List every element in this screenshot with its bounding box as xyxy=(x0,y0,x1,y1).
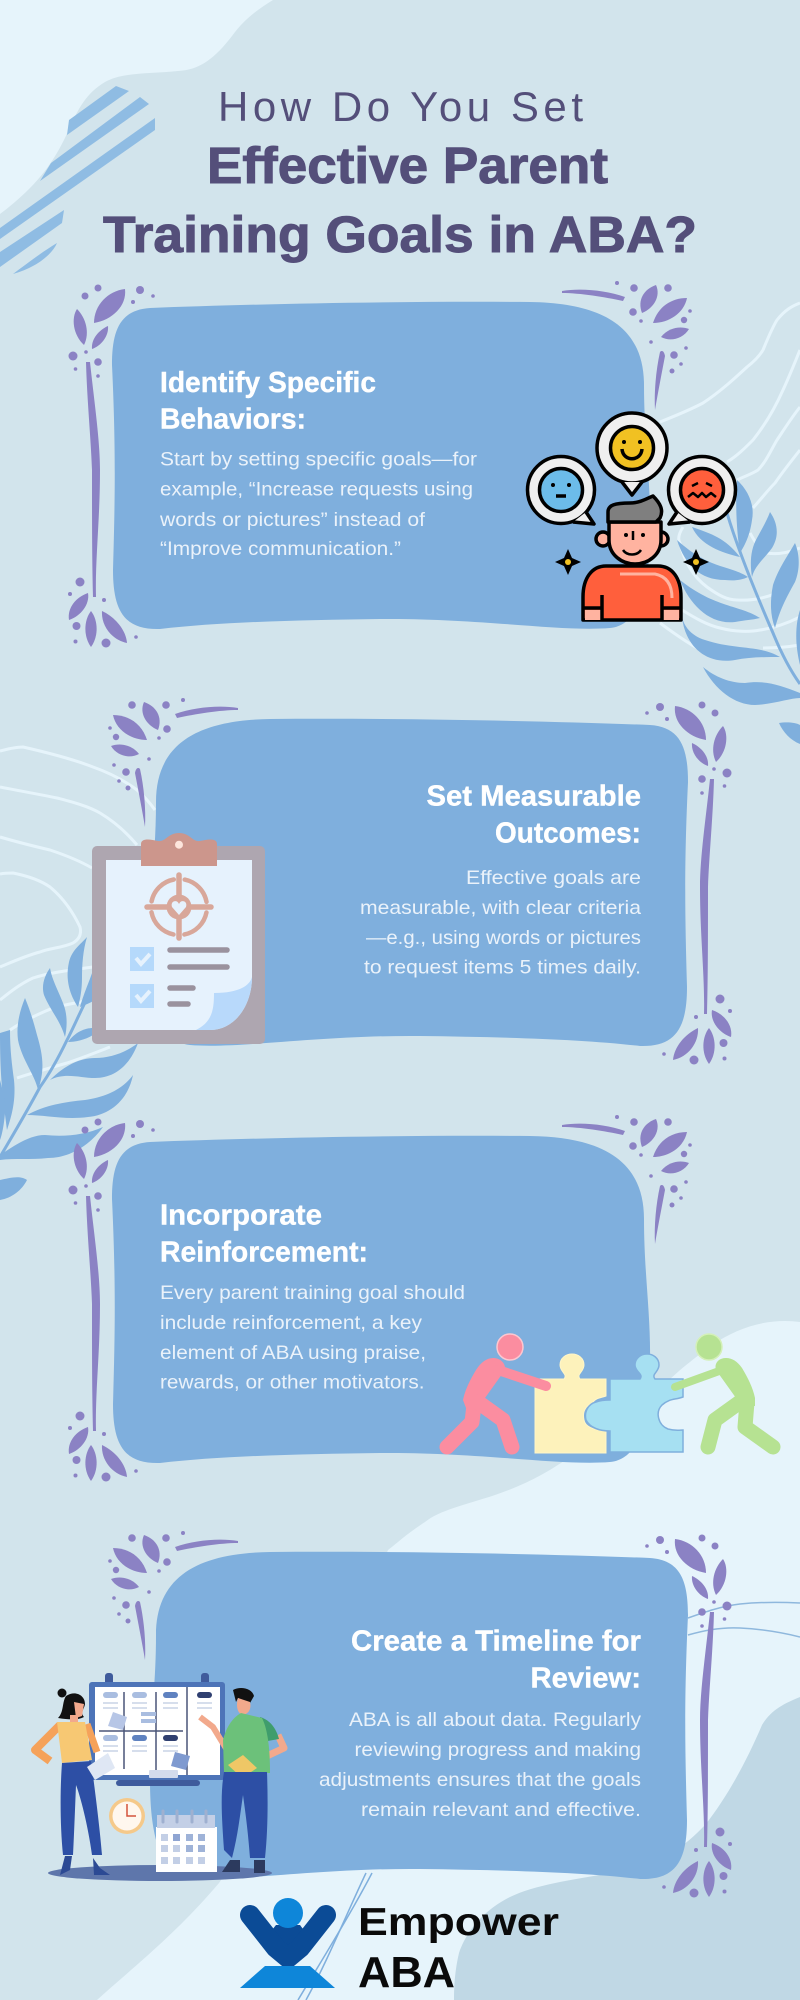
heading: Reinforcement: xyxy=(160,1236,368,1268)
body text: Effective goals are xyxy=(466,867,641,889)
body text: —e.g., using words or pictures xyxy=(366,927,641,949)
body text: adjustments ensures that the goals xyxy=(319,1769,641,1791)
icon: upset bubble xyxy=(668,456,736,524)
diagonal stripes top-left xyxy=(0,86,155,274)
lower light blob xyxy=(97,1321,800,2000)
thin blue lines bottom xyxy=(298,1873,372,2000)
icon: pink figure xyxy=(447,1334,546,1447)
thin blue lines right xyxy=(688,1602,800,1637)
body text: element of ABA using praise, xyxy=(160,1342,426,1364)
title: How Do You Set xyxy=(218,83,583,130)
decorative leaf right xyxy=(677,480,800,744)
icon: blue puzzle piece xyxy=(585,1354,683,1452)
icon: man xyxy=(583,496,681,621)
lower right darker blob xyxy=(454,1697,800,2000)
heading xyxy=(160,367,376,436)
body text xyxy=(360,867,641,978)
icon: yellow puzzle piece xyxy=(535,1354,606,1453)
title: Training Goals in ABA? xyxy=(103,206,697,263)
logo text xyxy=(358,1901,559,1997)
heading: Create a Timeline for xyxy=(351,1626,641,1658)
heading xyxy=(160,1200,368,1268)
woman xyxy=(35,1688,115,1875)
heading: Set Measurable xyxy=(426,780,641,812)
white contour lines right xyxy=(660,303,800,648)
body text: Every parent training goal should xyxy=(160,1282,465,1304)
title: Effective Parent xyxy=(207,137,608,194)
panel: incorporate reinforcement xyxy=(68,1115,692,1482)
body text: words or pictures” instead of xyxy=(159,509,426,531)
panel: create a timeline for review xyxy=(108,1531,732,1898)
body text xyxy=(160,1282,465,1394)
body text: reviewing progress and making xyxy=(354,1739,641,1761)
title xyxy=(103,83,697,263)
icon: clipboard with target xyxy=(92,833,265,1044)
schedule board xyxy=(89,1673,225,1786)
heading: Outcomes: xyxy=(495,818,641,850)
heading: Identify Specific xyxy=(160,367,376,399)
body text: to request items 5 times daily. xyxy=(364,956,641,978)
body text: measurable, with clear criteria xyxy=(360,897,641,919)
icon: people pushing puzzle pieces xyxy=(447,1334,773,1453)
panel: set measurable outcomes xyxy=(108,698,732,1064)
icon: green figure xyxy=(675,1334,773,1447)
icon: logo mark xyxy=(240,1898,335,1988)
ground shadow xyxy=(48,1865,272,1881)
body text xyxy=(319,1709,641,1821)
icon: clock xyxy=(109,1798,145,1834)
icon: sparkles xyxy=(555,549,709,575)
body text: include reinforcement, a key xyxy=(160,1312,422,1334)
icon: person with emotion bubbles xyxy=(528,413,736,621)
heading: Incorporate xyxy=(160,1200,322,1232)
man xyxy=(200,1688,284,1873)
heading: Review: xyxy=(530,1662,641,1694)
logo: Empower ABA xyxy=(240,1898,559,1997)
logo text: ABA xyxy=(358,1948,455,1997)
body text: rewards, or other motivators. xyxy=(160,1372,424,1394)
body text: ABA is all about data. Regularly xyxy=(349,1709,641,1731)
icon: happy bubble xyxy=(597,413,667,495)
panel: identify specific behaviors xyxy=(68,281,692,648)
logo text: Empower xyxy=(358,1901,559,1944)
illustration: planning board with two people xyxy=(35,1673,284,1881)
icon: neutral bubble xyxy=(528,456,594,524)
heading: Behaviors: xyxy=(160,404,306,436)
heading xyxy=(426,780,641,850)
white contour lines left xyxy=(0,747,155,1078)
body text xyxy=(159,448,478,560)
body text: example, “Increase requests using xyxy=(160,478,473,500)
decorative leaf left xyxy=(0,937,138,1200)
top-left light blob xyxy=(0,0,273,214)
icon: calendar xyxy=(156,1811,217,1872)
body text: remain relevant and effective. xyxy=(361,1799,641,1821)
body text: “Improve communication.” xyxy=(160,538,401,560)
body text: Start by setting specific goals—for xyxy=(160,448,478,470)
heading xyxy=(351,1626,641,1694)
